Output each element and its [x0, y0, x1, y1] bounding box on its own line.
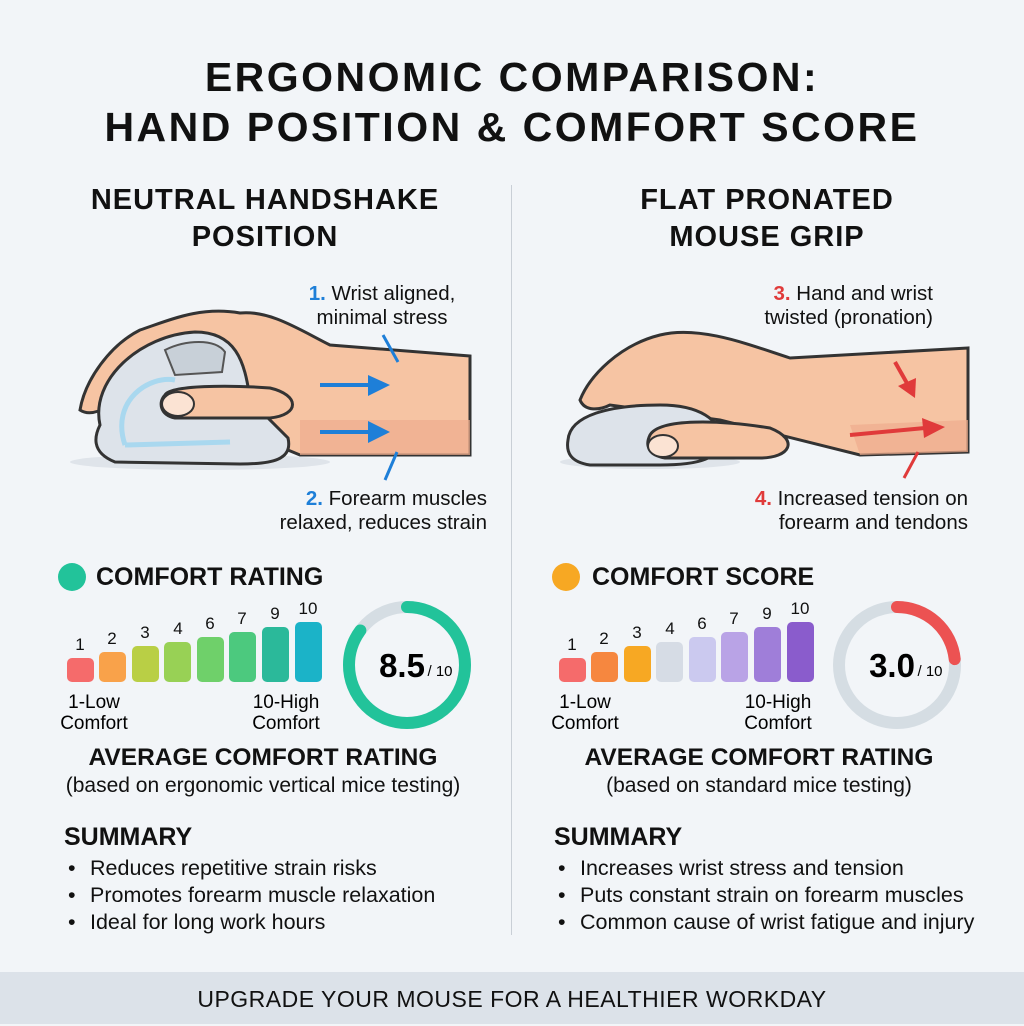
illustration: vertical mouse hand	[70, 310, 472, 481]
summary left: Reduces repetitive strain risks	[90, 856, 377, 880]
summary right	[554, 823, 974, 934]
bar chart: comfort scale right: 9	[762, 604, 772, 623]
heading: average rating right	[585, 744, 933, 797]
bar chart: comfort scale right	[551, 599, 814, 734]
heading: neutral	[91, 184, 439, 253]
arrows	[320, 383, 370, 387]
heading: average rating	[66, 744, 460, 797]
bar chart: comfort scale: 4	[173, 619, 183, 638]
callout 1: 1. Wrist aligned,	[309, 282, 455, 305]
bar chart: comfort scale right: Comfort	[744, 713, 812, 734]
bar chart: comfort scale: 2	[107, 629, 117, 648]
heading: flat: MOUSE GRIP	[669, 221, 865, 253]
heading: average rating: AVERAGE COMFORT RATING	[89, 744, 437, 771]
bar chart: comfort scale: 1	[75, 635, 85, 654]
callout 3	[764, 282, 933, 329]
title: HAND POSITION & COMFORT SCORE	[104, 104, 920, 150]
panel: flat pronated	[551, 184, 974, 934]
illustration: flat mouse hand	[560, 330, 970, 479]
footer banner	[0, 972, 1024, 1024]
bar chart: comfort scale right: 4	[665, 619, 675, 638]
callout 2	[280, 487, 487, 534]
divider	[511, 185, 512, 935]
arrows	[895, 362, 908, 385]
summary right: Puts constant strain on forearm muscles	[580, 883, 964, 907]
summary right: SUMMARY	[554, 823, 682, 851]
summary left: Ideal for long work hours	[90, 910, 325, 934]
title: ERGONOMIC COMPARISON:	[205, 54, 819, 100]
heading: neutral: POSITION	[192, 221, 338, 253]
heading: comfort rating: COMFORT RATING	[96, 563, 323, 591]
summary right: Increases wrist stress and tension	[580, 856, 904, 880]
bar chart: comfort scale: 6	[205, 614, 215, 633]
bar chart: comfort scale: Comfort	[60, 713, 128, 734]
heading: neutral: NEUTRAL HANDSHAKE	[91, 184, 439, 216]
heading: flat	[640, 184, 894, 253]
donut: 8.5/10: / 10	[427, 663, 453, 680]
callout 4: 4. Increased tension on	[755, 487, 968, 510]
bar chart: comfort scale right: 1-Low	[559, 692, 611, 713]
bar chart: comfort scale: Comfort	[252, 713, 320, 734]
panel: neutral handshake	[58, 184, 487, 934]
bar chart: comfort scale: 10-High	[253, 692, 319, 713]
donut: 8.5/10: 8.5	[379, 647, 425, 684]
bar chart: comfort scale right: 10-High	[745, 692, 811, 713]
heading: average rating right: (based on standard mice testing)	[606, 774, 912, 797]
bar chart: comfort scale right: Comfort	[551, 713, 619, 734]
bar chart: comfort scale right: 7	[729, 609, 739, 628]
summary left	[64, 823, 435, 934]
heading: average rating right: AVERAGE COMFORT RATING	[585, 744, 933, 771]
bar chart: comfort scale: 9	[270, 604, 280, 623]
bar chart: comfort scale: 3	[140, 623, 150, 642]
callout 4	[755, 487, 968, 534]
donut: 3.0/10: / 10	[917, 663, 943, 680]
donut: 8.5/10	[343, 601, 471, 729]
callout 2: relaxed, reduces strain	[280, 511, 487, 534]
callout 1: minimal stress	[316, 306, 448, 329]
bar chart: comfort scale right: 2	[599, 629, 609, 648]
callout 3: twisted (pronation)	[764, 306, 933, 329]
title	[104, 54, 920, 150]
bar chart: comfort scale: 1-Low	[68, 692, 120, 713]
summary left: Promotes forearm muscle relaxation	[90, 883, 435, 907]
bar chart: comfort scale right: 3	[632, 623, 642, 642]
bar chart: comfort scale right: 6	[697, 614, 707, 633]
footer banner: UPGRADE YOUR MOUSE FOR A HEALTHIER WORKDAY	[197, 986, 827, 1012]
donut: 3.0/10: 3.0	[869, 647, 915, 684]
bar chart: comfort scale: 10	[299, 599, 317, 618]
callout 1	[309, 282, 455, 329]
callout 2: 2. Forearm muscles	[306, 487, 487, 510]
summary right: Common cause of wrist fatigue and injury	[580, 910, 974, 934]
bar chart: comfort scale	[60, 599, 322, 734]
callout 3: 3. Hand and wrist	[773, 282, 933, 305]
heading: average rating: (based on ergonomic vertical mice testing)	[66, 774, 460, 797]
bar chart: comfort scale: 7	[237, 609, 247, 628]
callout 4: forearm and tendons	[779, 511, 968, 534]
heading: comfort score: COMFORT SCORE	[592, 563, 814, 591]
heading: flat: FLAT PRONATED	[640, 184, 894, 216]
donut: 3.0/10	[833, 601, 961, 729]
summary left: SUMMARY	[64, 823, 192, 851]
bar chart: comfort scale right: 1	[567, 635, 577, 654]
bar chart: comfort scale right: 10	[791, 599, 809, 618]
